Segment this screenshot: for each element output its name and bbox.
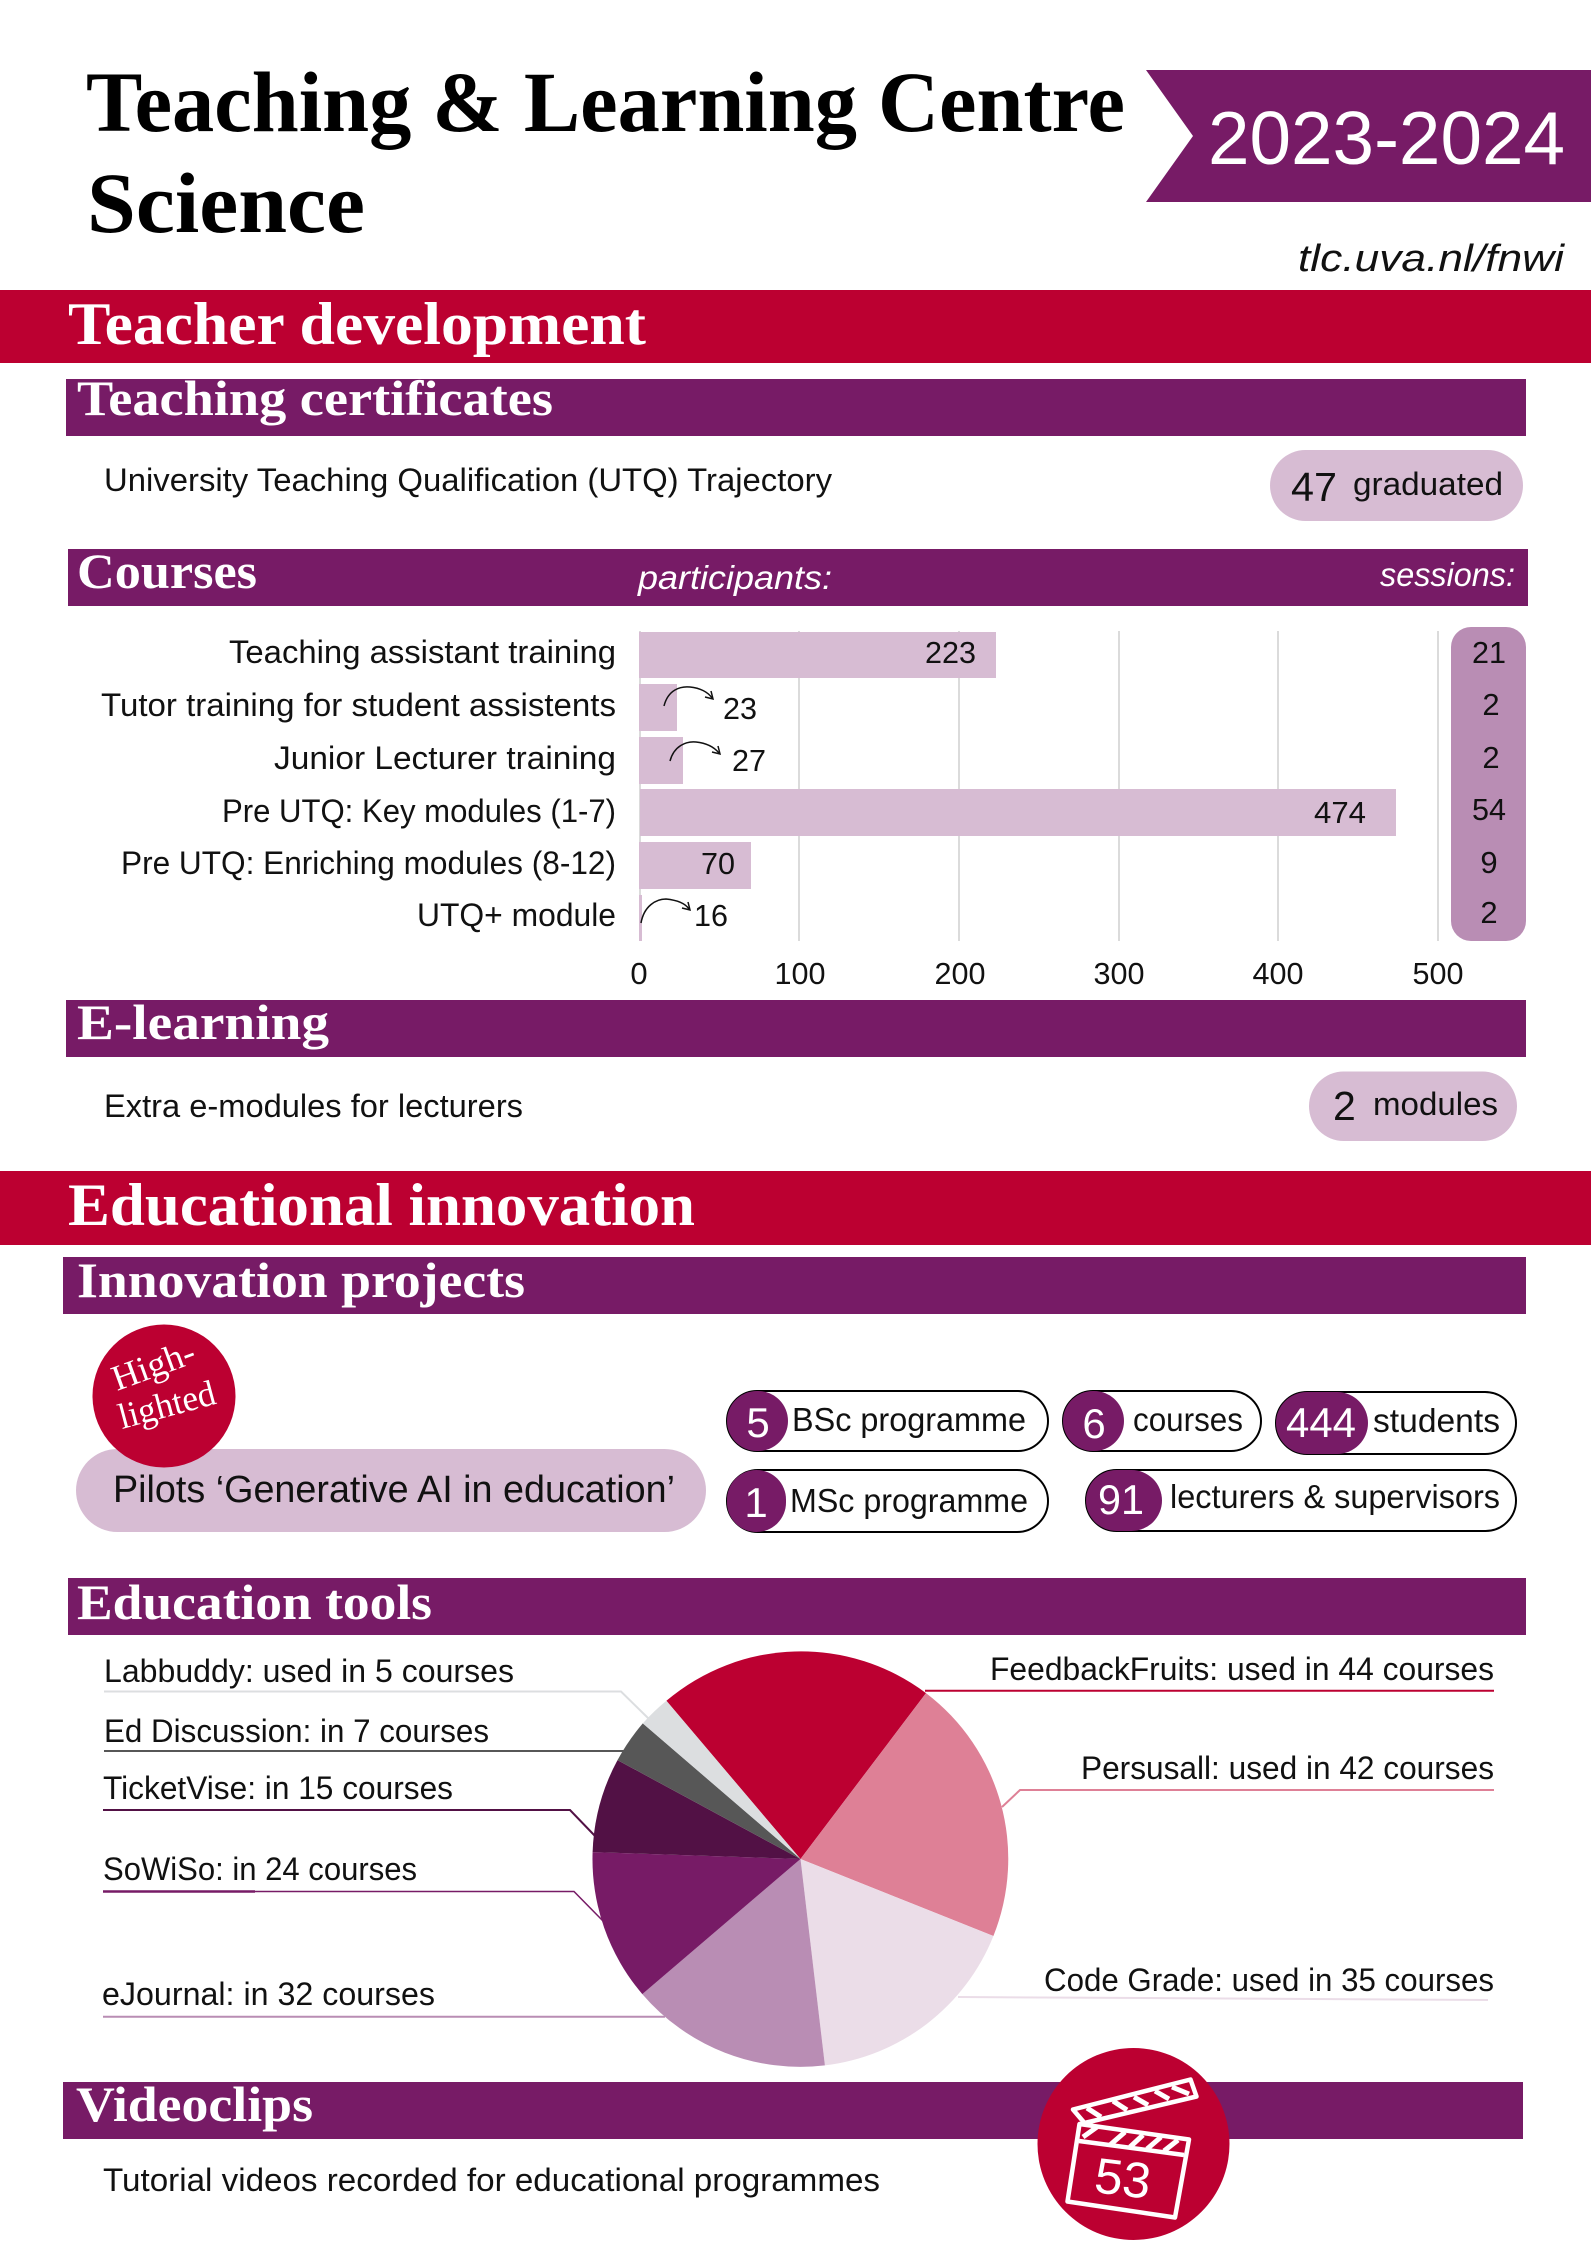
panel: videoclips xyxy=(63,2048,1523,2240)
text: tutorial videos: Tutorial videos recorded for educational programmes xyxy=(103,2162,880,2198)
icon: clapperboard 53 xyxy=(1038,2048,1230,2240)
panel: courses xyxy=(68,543,1528,991)
category labels: Pre UTQ: Key modules (1-7) xyxy=(222,793,616,829)
stat: 91 lecturers and supervisors: lecturers & supervisors xyxy=(1170,1478,1500,1515)
category labels: Teaching assistant training xyxy=(229,634,616,670)
x axis labels: 100 xyxy=(774,956,826,991)
stat: 6 courses: courses xyxy=(1133,1401,1243,1438)
heading: videoclips xyxy=(63,2076,1523,2139)
title: Teaching & Learning Centre xyxy=(86,54,1125,150)
badge: highlighted: High- xyxy=(106,1332,201,1399)
stat: 5 BSc programme xyxy=(727,1391,1048,1451)
stat: 1 MSc programme: 1 xyxy=(744,1479,768,1526)
x axis labels: 0 xyxy=(630,956,648,991)
header xyxy=(86,54,1591,280)
arrow: value 27 xyxy=(670,742,720,761)
arrow: value 16 xyxy=(641,899,690,923)
label: Labbuddy xyxy=(104,1653,649,1719)
heading: courses: Courses xyxy=(77,543,257,599)
heading: videoclips: Videoclips xyxy=(76,2076,313,2132)
website url: tlc.uva.nl/fnwi xyxy=(1298,238,1566,280)
category labels: Pre UTQ: Enriching modules (8-12) xyxy=(121,845,616,881)
badge: 2 modules: 2 xyxy=(1333,1083,1356,1129)
panel: innovation projects xyxy=(63,1252,1526,1532)
x axis labels: 200 xyxy=(934,956,986,991)
arrow: value 23 xyxy=(664,687,713,706)
panel: education tools xyxy=(68,1574,1526,2067)
stat: 1 MSc programme: MSc programme xyxy=(790,1482,1028,1519)
pilot pill: Pilots ‘Generative AI in education’ xyxy=(113,1469,675,1511)
category labels: UTQ+ module xyxy=(417,897,616,933)
label: Code Grade: Code Grade: used in 35 courses xyxy=(1044,1962,1494,1998)
panel: e-learning xyxy=(66,994,1526,1141)
panel: teaching certificates xyxy=(66,370,1526,521)
heading: courses xyxy=(68,543,1528,606)
heading: education tools xyxy=(68,1574,1526,1635)
sessions column: 2 xyxy=(1482,687,1500,722)
sessions column: 21 xyxy=(1472,635,1506,670)
text: extra e-modules: Extra e-modules for lecturers xyxy=(104,1088,523,1124)
heading: teaching certificates: Teaching certificates xyxy=(77,370,553,426)
stat: 6 courses xyxy=(1063,1391,1261,1451)
badge: highlighted xyxy=(92,1324,236,1468)
heading: courses: participants: xyxy=(637,559,832,596)
heading: teaching certificates xyxy=(66,370,1526,436)
badge: highlighted: lighted xyxy=(114,1372,220,1437)
badge: 47 graduated: 47 xyxy=(1291,464,1337,510)
value labels: 27 xyxy=(732,743,766,778)
label: SoWiSo: SoWiSo: in 24 courses xyxy=(103,1851,417,1887)
x axis labels: 400 xyxy=(1252,956,1304,991)
stat: 91 lecturers and supervisors xyxy=(1086,1470,1516,1531)
x axis labels: 300 xyxy=(1094,956,1144,991)
icon: clapperboard 53: 53 xyxy=(1092,2147,1154,2210)
badge: 47 graduated xyxy=(1270,450,1523,521)
badge: 47 graduated: graduated xyxy=(1353,466,1503,502)
year banner xyxy=(1146,70,1591,202)
label: Persusall xyxy=(1002,1750,1494,1807)
sessions column: 2 xyxy=(1480,895,1498,930)
label: eJournal: eJournal: in 32 courses xyxy=(102,1976,435,2012)
section band: teacher development xyxy=(0,290,1591,363)
heading: innovation projects: Innovation projects xyxy=(77,1252,525,1308)
stat: 6 courses: 6 xyxy=(1082,1400,1106,1447)
badge: 2 modules: modules xyxy=(1373,1086,1498,1122)
section band: educational innovation: Educational innovation xyxy=(68,1172,695,1238)
value labels: 23 xyxy=(723,691,757,726)
stat: 444 students: 444 xyxy=(1286,1399,1356,1446)
x axis labels xyxy=(630,956,1464,991)
heading: courses: sessions: xyxy=(1380,556,1515,593)
stat: 444 students xyxy=(1276,1392,1516,1454)
value labels: 16 xyxy=(694,898,728,933)
text: UTQ trajectory: University Teaching Qualification (UTQ) Trajectory xyxy=(104,462,832,498)
sessions column: 2 xyxy=(1482,740,1500,775)
pie chart xyxy=(592,1651,1008,2067)
sessions column: 54 xyxy=(1472,792,1506,827)
category labels xyxy=(101,634,616,933)
bar chart: participants xyxy=(101,631,1464,991)
stat: 5 BSc programme: 5 xyxy=(746,1399,770,1446)
heading: e-learning: E-learning xyxy=(77,994,329,1050)
label: FeedbackFruits: FeedbackFruits: used in 44 courses xyxy=(990,1651,1494,1687)
label: Labbuddy: Labbuddy: used in 5 courses xyxy=(104,1653,514,1689)
title: Science xyxy=(87,155,365,251)
section band: educational innovation xyxy=(0,1171,1591,1245)
label: TicketVise xyxy=(103,1770,595,1836)
x axis labels: 500 xyxy=(1412,956,1464,991)
category labels: Junior Lecturer training xyxy=(274,740,616,776)
heading: e-learning xyxy=(66,994,1526,1057)
value labels: 223 xyxy=(925,635,976,670)
pilot pill xyxy=(76,1449,706,1532)
label: SoWiSo xyxy=(103,1851,603,1921)
stat: 91 lecturers and supervisors: 91 xyxy=(1098,1476,1144,1523)
title xyxy=(86,54,1125,251)
heading: education tools: Education tools xyxy=(77,1574,432,1630)
section band: teacher development: Teacher development xyxy=(68,291,646,357)
sessions column xyxy=(1451,627,1526,941)
stat: 5 BSc programme: BSc programme xyxy=(792,1401,1026,1438)
value labels: 474 xyxy=(1314,795,1366,830)
value labels: 70 xyxy=(701,846,735,881)
label: Ed Discussion: Ed Discussion: in 7 courses xyxy=(104,1713,489,1749)
sessions column: 9 xyxy=(1480,845,1498,880)
stat: 444 students: students xyxy=(1373,1402,1500,1439)
category labels: Tutor training for student assistents xyxy=(101,687,616,723)
heading: innovation projects xyxy=(63,1252,1526,1314)
stat: 1 MSc programme xyxy=(727,1470,1048,1532)
badge: 2 modules xyxy=(1309,1072,1517,1141)
year banner: 2023-2024 xyxy=(1208,96,1565,180)
label: Persusall: Persusall: used in 42 courses xyxy=(1081,1750,1494,1786)
value labels xyxy=(694,635,1366,933)
label: TicketVise: TicketVise: in 15 courses xyxy=(103,1770,453,1806)
